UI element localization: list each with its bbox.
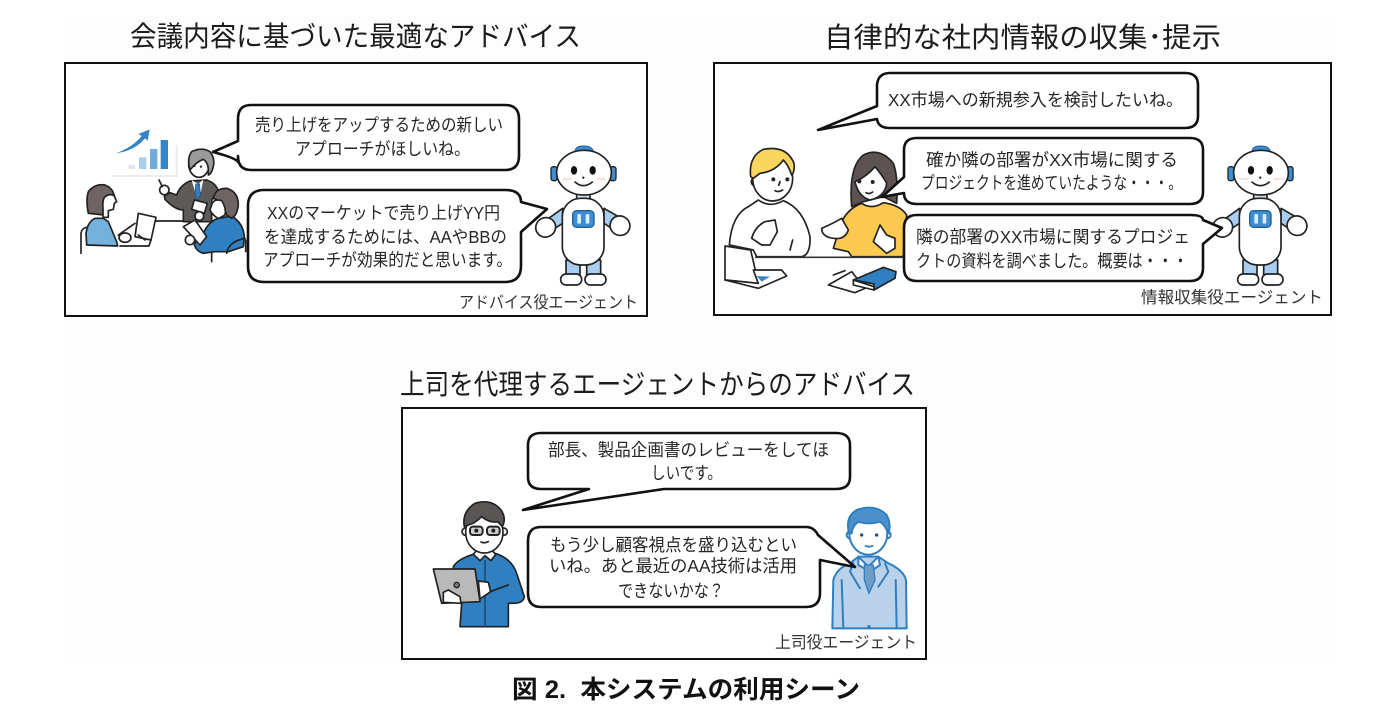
speech bubble: neighbouring department: 確か隣の部署がXX市場に関する bbox=[926, 150, 1178, 170]
speech bubble: considering new market: XX市場への新規参入を検討したいね。 bbox=[888, 90, 1183, 110]
speech bubble: request for new approach: 売り上げをアップするための新しい bbox=[255, 115, 503, 135]
seated man with papers bbox=[183, 188, 246, 262]
speech bubble: manager agent feedback: もう少し顧客視点を盛り込むとい bbox=[550, 535, 797, 555]
heading: information gathering: 自律的な社内情報の収集･提示 bbox=[824, 22, 1221, 53]
figure caption: 図 2. 本システムの利用シーン bbox=[512, 676, 860, 704]
speech bubble: manager agent feedback: できないかな？ bbox=[618, 581, 724, 601]
heading: advice: 会議内容に基づいた最適なアドバイス bbox=[130, 21, 581, 52]
book and papers bbox=[828, 267, 896, 293]
illustration: colleagues at table bbox=[725, 149, 907, 293]
speech bubble: agent advice: を達成するためには、AAやBBの bbox=[264, 227, 507, 247]
speech bubble: agent research result bbox=[904, 215, 1222, 281]
speech bubble: neighbouring department: プロジェクトを進めていたような・・・。 bbox=[921, 173, 1182, 193]
panel: advice agent bbox=[65, 21, 647, 316]
speech bubble: manager agent feedback bbox=[528, 527, 855, 607]
speech bubble: request for new approach: アプローチがほしいね。 bbox=[295, 139, 470, 159]
speech bubble: request for review: 部長、製品企画書のレビューをしてほ bbox=[548, 440, 829, 460]
table with laptop bbox=[725, 246, 903, 288]
woman in yellow bbox=[822, 152, 907, 257]
laptop and table bbox=[118, 213, 183, 246]
speech bubble: considering new market bbox=[818, 73, 1198, 130]
icon: growth chart bbox=[112, 129, 177, 176]
panel: manager proxy agent bbox=[400, 369, 926, 659]
panel frame bbox=[65, 63, 647, 316]
heading: manager proxy advice: 上司を代理するエージェントからのアドバイス bbox=[400, 369, 915, 400]
speech bubble: agent research result: 隣の部署のXX市場に関するプロジェ bbox=[916, 227, 1190, 247]
panel frame bbox=[402, 408, 926, 659]
presenter bbox=[159, 149, 218, 222]
speech bubble: agent research result: クトの資料を調べました。概要は・・・ bbox=[916, 251, 1188, 271]
seated woman bbox=[81, 185, 131, 253]
label: information gathering agent: 情報収集役エージェント bbox=[1141, 288, 1323, 307]
speech bubble: manager agent feedback: いね。あと最近のAA技術は活用 bbox=[549, 556, 797, 576]
label: advice agent: アドバイス役エージェント bbox=[459, 293, 638, 312]
speech bubble: request for review bbox=[523, 433, 850, 510]
speech bubble: neighbouring department bbox=[882, 138, 1203, 204]
panel: information gathering agent bbox=[714, 22, 1331, 315]
speech bubble: agent advice: アプローチが効果的だと思います。 bbox=[263, 250, 512, 270]
icon: robot agent bbox=[532, 146, 633, 285]
icon: robot agent bbox=[1209, 146, 1310, 285]
label: manager agent: 上司役エージェント bbox=[775, 633, 917, 652]
man with yellow hair bbox=[729, 149, 810, 257]
speech bubble: request for new approach bbox=[213, 105, 519, 170]
illustration: meeting scene bbox=[81, 129, 246, 262]
speech bubble: agent advice bbox=[248, 190, 547, 282]
illustration: manager agent bbox=[832, 508, 907, 628]
panel frame bbox=[714, 63, 1331, 315]
speech bubble: request for review: しいです。 bbox=[651, 463, 722, 483]
speech bubble: agent advice: XXのマーケットで売り上げYY円 bbox=[267, 203, 500, 223]
illustration: employee with laptop bbox=[433, 502, 524, 627]
